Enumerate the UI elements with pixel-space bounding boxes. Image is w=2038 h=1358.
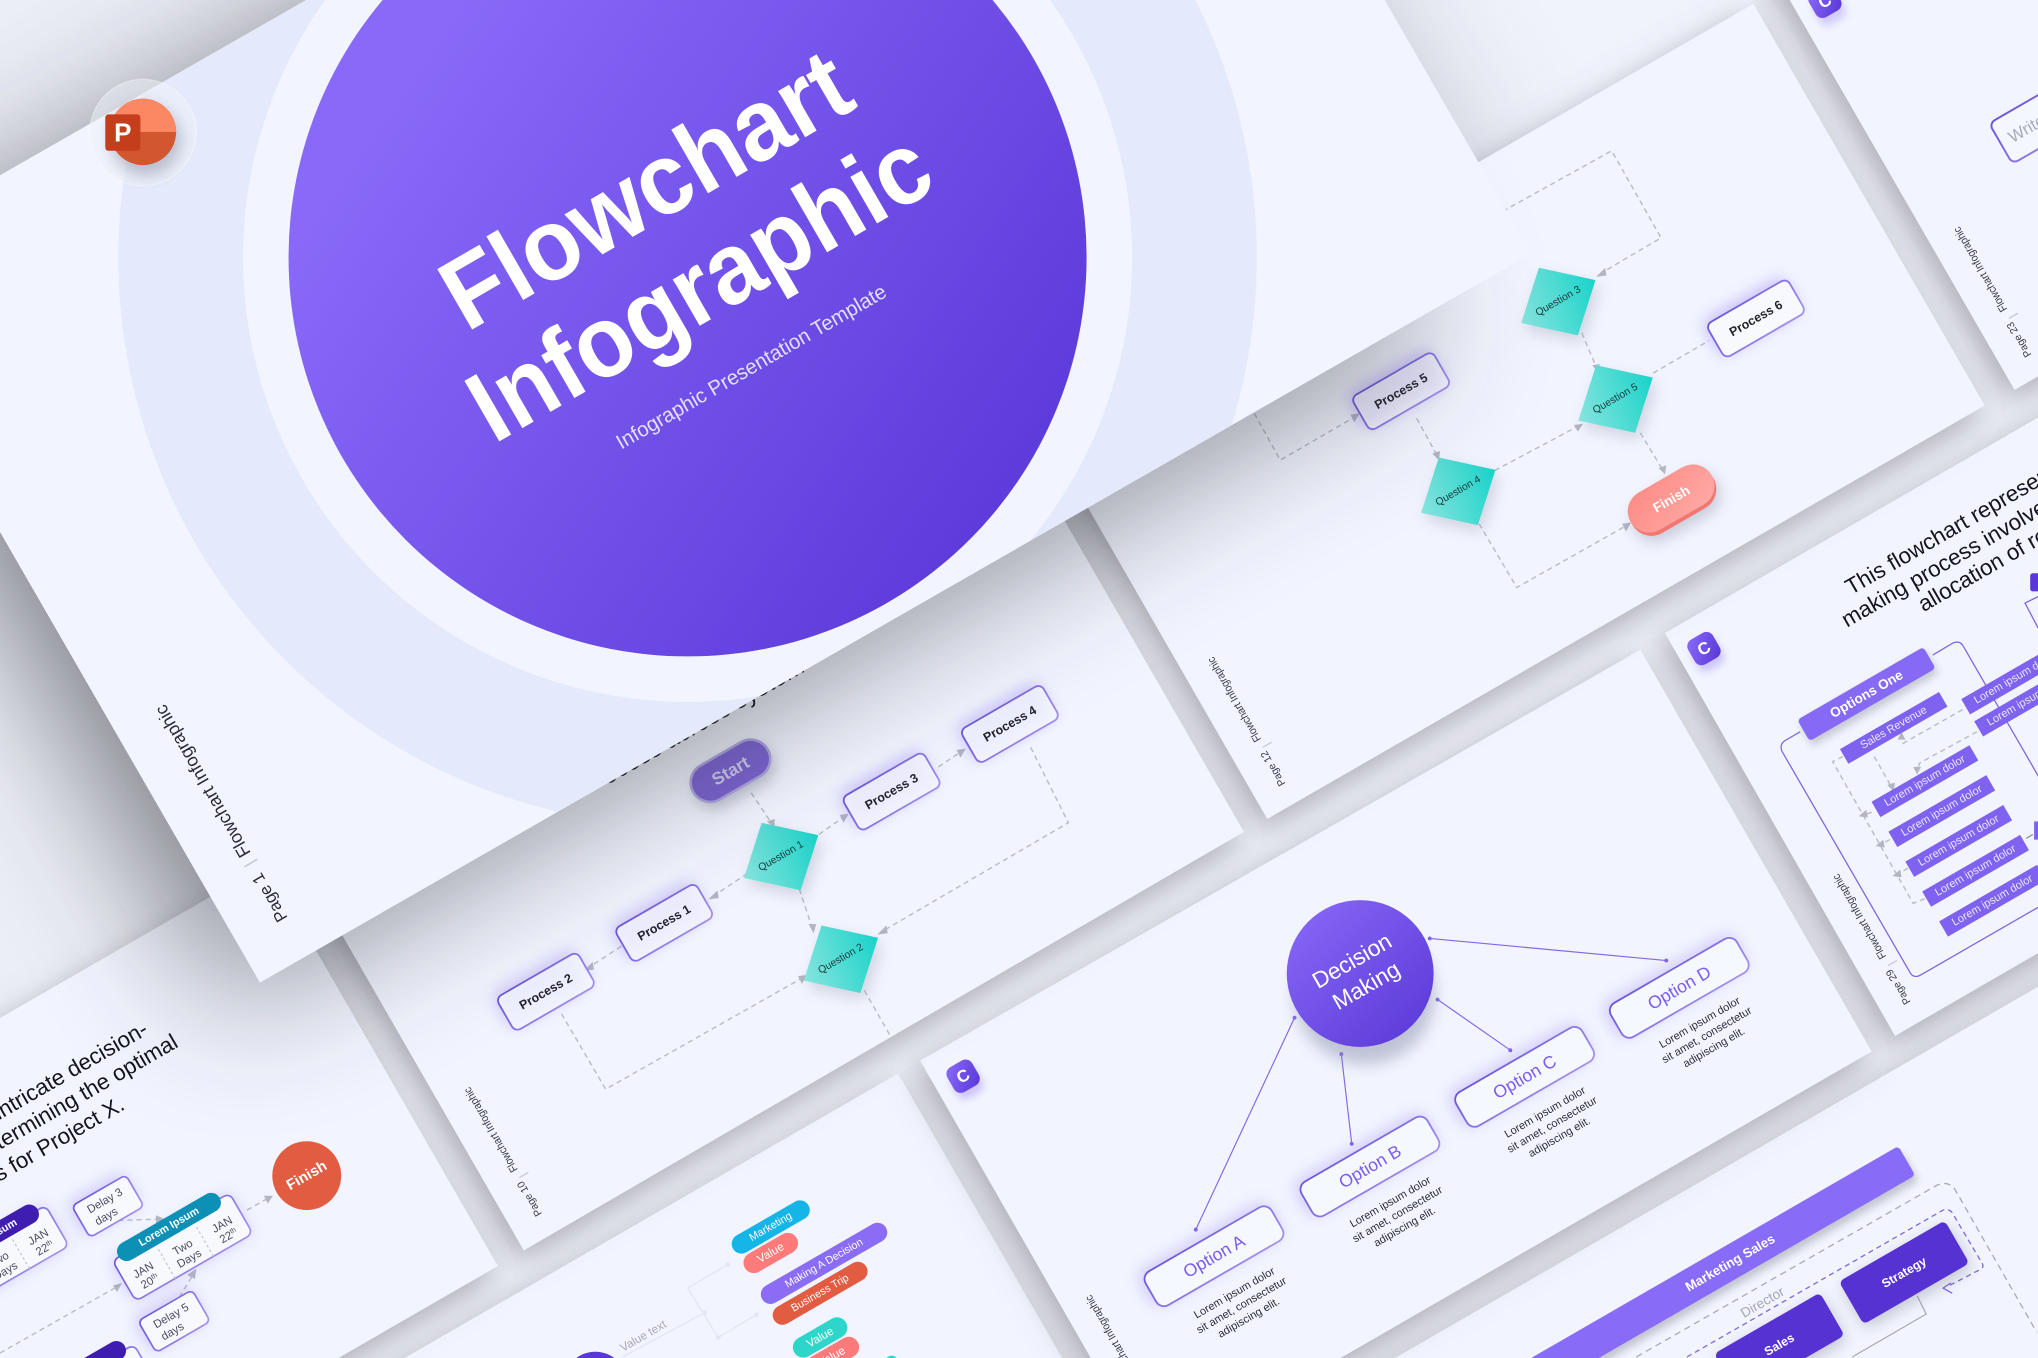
box: delay 3: [66, 1170, 144, 1239]
pill: business trip: [769, 1258, 871, 1328]
icon: powerpoint: [90, 79, 196, 186]
process 1: Process 1: [635, 902, 693, 944]
box: strategy: [1839, 1221, 1972, 1329]
box: delay 5: [132, 1285, 210, 1355]
header: lower dark: [19, 1337, 130, 1358]
page label cover: Page 1: [248, 870, 291, 925]
page label 12: [1205, 654, 1288, 788]
process 2: Process 2: [517, 971, 575, 1013]
box: timeline middle: th: [228, 1226, 238, 1236]
box: timeline middle: [109, 1191, 253, 1302]
pill: value pink 2: [801, 1333, 863, 1358]
panel: value slide: [370, 1074, 1074, 1358]
process 1: [609, 878, 714, 964]
box: strategy: Strategy: [1879, 1254, 1929, 1291]
question 5: [1559, 344, 1676, 461]
heading fragment under cover slide: ocess across system: [597, 653, 809, 790]
panel: page 12 slide: [1036, 4, 1985, 819]
bar: options one: [1797, 647, 1939, 746]
page label 29: Flowchart Infographic: [1831, 871, 1889, 961]
dashed connectors: [1254, 151, 1709, 587]
box: timeline left: 22: [34, 1242, 51, 1259]
option A: [1134, 1198, 1287, 1312]
process 3: [837, 747, 942, 833]
question 1: [725, 801, 842, 919]
description D: sit amet, consectetur: [1660, 1005, 1754, 1066]
pill: value teal: Value: [804, 1325, 836, 1350]
process 6: Process 6: [1727, 298, 1785, 339]
bars: lorem list: [1872, 573, 2038, 937]
question 5: Question 5: [1591, 382, 1640, 416]
circle: decision making: [1287, 900, 1435, 1065]
description A: sit amet, consectetur: [1195, 1275, 1289, 1336]
dashed connectors: [561, 747, 1068, 1089]
dashed connectors: [0, 1196, 273, 1353]
description B: sit amet, consectetur: [1351, 1184, 1445, 1245]
box: timeline middle: JAN: [131, 1260, 156, 1281]
circle: finish: [272, 1141, 341, 1210]
cover slide shadow: [0, 0, 1430, 1014]
pill: marketing: [728, 1197, 813, 1257]
description B: Lorem ipsum dolor: [1348, 1174, 1433, 1230]
outer ring: [118, 0, 1257, 827]
dashed connectors: [1833, 710, 1977, 903]
header: lorem ipsum: [113, 1189, 224, 1265]
box: write: [1989, 52, 2038, 164]
description A: Lorem ipsum dolor: [1192, 1265, 1277, 1321]
start pill: Start: [708, 752, 753, 789]
cover slide shadow on upper slide: [0, 0, 1540, 983]
process 6: [1701, 274, 1806, 360]
subtitle: Infographic Presentation Template: [612, 280, 891, 454]
icon: C logo page 29: [1684, 629, 1727, 675]
dashed outline outer: [1636, 1183, 2037, 1357]
process 5: Process 5: [1372, 370, 1430, 412]
page label 29: Page 29: [1884, 967, 1913, 1006]
panel: hidden slide upper centre: [650, 0, 1753, 417]
circle: finish: Finish: [283, 1157, 330, 1194]
pill: value pink: Value: [755, 1240, 787, 1266]
finish pill: [1620, 457, 1728, 550]
box: timeline left: [0, 1203, 69, 1315]
process 5: [1346, 346, 1451, 433]
icon: powerpoint: P: [114, 118, 131, 148]
bars: lorem list: Lorem ipsum dolor: [1950, 873, 2035, 929]
panel: project x slide: [0, 864, 498, 1358]
box: delay 3: Delay 3: [85, 1186, 125, 1216]
box: delay 3: days: [93, 1206, 120, 1228]
option B: Option B: [1335, 1141, 1405, 1192]
bars: lorem list: Lorem ipsum dolor: [1882, 753, 1968, 809]
pill: business trip: Business Trip: [789, 1272, 851, 1315]
pill: making a decision: [757, 1219, 891, 1308]
question 3: Question 3: [1534, 284, 1583, 319]
bars: lorem list: Lorem ipsum dolor: [1933, 843, 2018, 899]
bar: sales revenue: [1840, 692, 1947, 764]
page label 23: Page 23: [2005, 320, 2034, 359]
description A: adipiscing elit.: [1216, 1296, 1282, 1341]
option C: [1445, 1019, 1597, 1133]
bars: lorem list: Lorem ipsum dolor: [1899, 783, 1985, 839]
bar: options one: Options One: [1827, 667, 1906, 721]
box: sales: [1714, 1293, 1847, 1358]
start pill: [684, 732, 781, 816]
description C: sit amet, consectetur: [1505, 1094, 1600, 1156]
arrow inner: [1943, 1283, 1952, 1293]
page label 10: Page 10: [516, 1179, 545, 1218]
question 2: [784, 904, 901, 1021]
pill: value teal: [789, 1313, 851, 1358]
pill: making a decision: Making A Decision: [783, 1236, 865, 1291]
box: timeline middle: th: [150, 1271, 159, 1281]
box: timeline left: th: [45, 1238, 54, 1248]
pill: marketing: Marketing: [747, 1210, 794, 1244]
purple circle: [289, 0, 1087, 656]
page label 12: Page 12: [1259, 748, 1288, 788]
arrows: [1194, 936, 1668, 1232]
page label cover: [151, 701, 291, 925]
question 4: Question 4: [1434, 474, 1483, 509]
box: timeline middle: Days: [175, 1247, 204, 1271]
process 2: [491, 947, 596, 1033]
header: lorem ipsum: Lorem Ipsum: [137, 1205, 201, 1249]
header: left dark: [0, 1201, 43, 1276]
finish pill: Finish: [1650, 483, 1693, 516]
description C: Lorem ipsum dolor: [1503, 1084, 1588, 1141]
description D: Lorem ipsum dolor: [1657, 995, 1743, 1051]
box: timeline left: JAN: [26, 1227, 51, 1248]
panel: page 10 slide: [292, 430, 1244, 1250]
connector solid: [1852, 1296, 1926, 1357]
bar: sales revenue: Sales Revenue: [1858, 704, 1929, 752]
box: timeline middle: 20: [139, 1275, 156, 1292]
icon: C logo decision: C: [953, 1065, 973, 1087]
question 1: Question 1: [757, 839, 806, 874]
circle: decision making: Decision: [1307, 927, 1396, 994]
page label 23: Flowchart Infographic: [1951, 224, 2010, 314]
bar: marketing sales: [1529, 1146, 1918, 1358]
process 4: Process 4: [981, 703, 1039, 745]
question 2: Question 2: [816, 942, 866, 977]
page label 12: Flowchart Infographic: [1205, 654, 1264, 744]
option C: Option C: [1489, 1051, 1560, 1103]
label: director: Director: [1738, 1284, 1787, 1321]
option D: [1599, 930, 1752, 1044]
title: Infographic: [448, 108, 951, 464]
bar: marketing sales: Marketing Sales: [1683, 1231, 1777, 1294]
page label 10: Flowchart Infographic: [462, 1085, 521, 1174]
box: delay 5: Delay 5: [152, 1301, 191, 1331]
box: timeline middle: Two: [171, 1237, 195, 1258]
process 4: [955, 679, 1060, 766]
description C: adipiscing elit.: [1526, 1115, 1593, 1160]
question 4: [1402, 436, 1519, 553]
page label 29: [1831, 871, 1913, 1006]
box: timeline lower: [17, 1344, 157, 1358]
pill: teal small: [885, 1356, 898, 1358]
box: timeline middle: 22: [218, 1230, 235, 1246]
tree lines: [623, 1262, 759, 1357]
dashed outline inner: [1687, 1210, 1983, 1357]
panel: page 23 slide: [1744, 0, 2038, 390]
label: value text: Value text: [618, 1317, 669, 1355]
description B: adipiscing elit.: [1372, 1205, 1438, 1250]
description D: adipiscing elit.: [1681, 1025, 1747, 1070]
option D: Option D: [1644, 962, 1714, 1014]
page label 10: [462, 1085, 545, 1218]
box: timeline middle: JAN: [210, 1215, 235, 1236]
icon: C logo page 23: [1805, 0, 1849, 29]
flow container outline: [1781, 642, 2038, 976]
panel: marketing sales slide: [1361, 888, 2038, 1358]
bars: lorem list: Lorem ipsum dolor: [1916, 813, 2002, 869]
box: sales: Sales: [1762, 1330, 1797, 1358]
panel: page 29 slide: [1665, 318, 2038, 1036]
node dot: [563, 1352, 627, 1358]
panel: cover slide: [0, 0, 1531, 983]
page label 23: [1951, 224, 2034, 359]
title: Flowchart: [421, 27, 870, 352]
box: delay 5: days: [159, 1321, 187, 1343]
pill: value pink: [740, 1229, 802, 1277]
process 3: Process 3: [863, 771, 921, 812]
option B: [1290, 1109, 1443, 1222]
icon: C logo decision: [944, 1057, 987, 1102]
question 3: [1502, 246, 1619, 364]
panel: decision making slide: [920, 650, 1872, 1358]
option A: Option A: [1180, 1231, 1248, 1282]
icon: C logo page 29: C: [1694, 637, 1714, 660]
circle: decision making: Making: [1328, 956, 1404, 1015]
page label cover: Flowchart Infographic: [151, 701, 255, 861]
